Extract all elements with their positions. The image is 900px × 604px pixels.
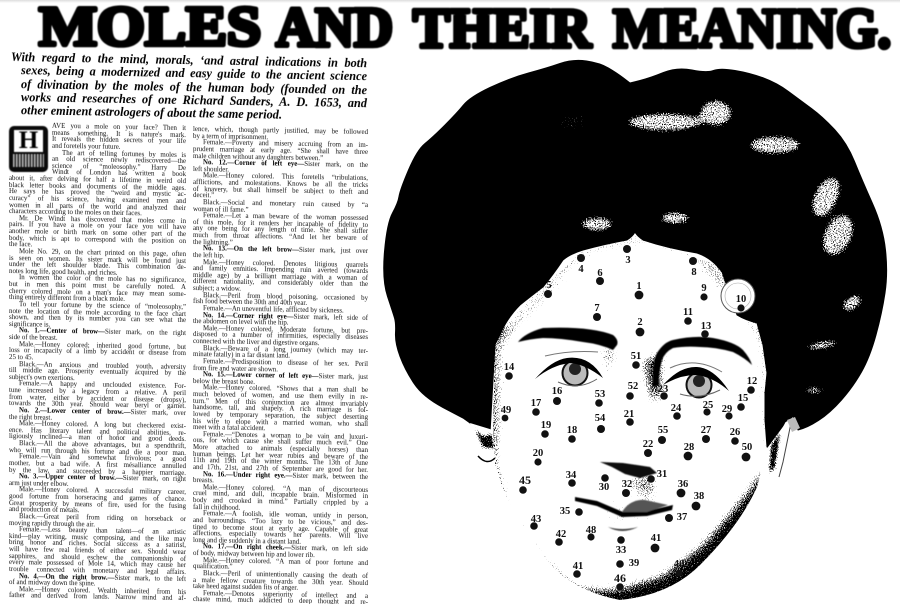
entry: mole no. 3: Female.—Less beauty than talent—of an artistic [19,526,186,536]
mole 33: 33 [616,545,626,556]
entry: mole no. 12: any one being for any length of time. She shall suffer [193,225,368,235]
entry: mole no. 16: fall in childhood. [193,504,240,511]
right eye [663,363,729,398]
icon: drop cap H: H [19,127,38,154]
left eye [535,352,603,386]
mole 1: 1 [636,281,642,292]
entry: mole no. 16: Female.—A foolish, idle woman, untidy in person, [203,510,368,520]
mole 5 [544,280,552,298]
introduction article: AVE you a mole on your face? Then it [52,122,186,132]
mole 31 [647,469,667,483]
introduction article: shown, and then by its number you can see what the [9,314,186,324]
introduction article: characters according to the moles on their faces. [9,208,142,217]
introduction article: Mole No. 29, on the chart printed on this page, often [19,248,186,257]
introduction article: science of “moleosophy.” Harry De [52,162,186,171]
entry: mole no. 3: will have few real friends of either sex. Should wear [9,546,186,556]
mole 45 [519,473,531,494]
entry: mole no. 16: breasts. [193,477,214,484]
entry: mole no. 14: No. 14.—Corner right eye—Sister mark, left side of [203,312,368,322]
entry: mole no. 1 [9,327,186,410]
entry: mole no. 12: of this mole, for it renders her incapable of fidelity to [193,219,368,229]
mole 22 [643,439,653,457]
entry: mole no. 1: No. 1.—Center of brow—Sister mark, on the right [19,327,186,337]
entry: mole no. 15: 11th and 19th of the winter months. The 13th of June [193,457,368,467]
entry: mole no. 14 [193,312,368,373]
entry: mole no. 16: Male.—Honey colored. “A man of discourteous [203,484,368,494]
mole 19 [541,420,551,438]
entry: mole no. 4: Male.—Honey colored. Wealth inherited from his [19,585,186,595]
entry: mole no. 2: mother, but a bad wife. A first mésalliance annulled [9,459,186,469]
mole 3 [623,245,631,266]
entry: mole no. 3: bring honor and riches. Social success as a satirist, [9,539,186,549]
mole 55 [658,425,668,444]
mole 16 [552,386,562,405]
entry: mole no. 3: Black.—Great peril from riding on horseback or [19,513,186,522]
entry: mole no. 17: take heed against sudden fits of anger. [193,583,298,592]
entry: mole no. 16: affections, especially towards her parents. Will live [193,530,368,540]
mole 40 [674,559,684,576]
moles with numbers [501,245,757,591]
mole 20: 20 [533,448,543,459]
mole 42 [555,529,566,546]
mole 9: 9 [701,283,707,294]
mole 35 [560,506,583,517]
entry: mole no. 1: from water, either by accident or disease (dropsy), [9,393,186,403]
text column 1 [9,122,186,602]
subtitle text block: other eminent astrologers of about the same period. [21,103,282,122]
entry: mole no. 15: No. 15.—Lower corner of left eye—Sister mark, just [203,371,368,381]
introduction article: note the location of the mole according to the face chart [9,307,186,317]
entry: end of previous mole: lence, which, though partly justified, may be followed [193,126,368,136]
entry: mole no. 14: disposed to a number of infirmities, especially diseases [193,331,368,341]
entry: mole no. 12: much from throat affections. “And let her beware of [193,232,368,242]
mole 30: 30 [599,482,609,493]
left ear [470,423,496,463]
mole 20 [533,448,543,466]
entry: mole no. 15: Female.—“Denotes a woman to be vain and luxuri- [203,431,368,441]
entry: mole no. 12: of knavery, but shall himself be subject to theft and [193,186,368,196]
entry: mole no. 1: loss or incapacity of a limb by accident or disease from [9,347,186,357]
entry: mole no. 2: ligiously inclined—a man of honor and good deeds. [9,433,186,443]
introduction article: pairs. If you have a mole on your face you will have [9,221,186,231]
introduction article: It reveals the hidden secrets of your life [52,136,186,145]
mole 54: 54 [595,413,606,424]
face chart illustration [383,60,888,600]
mole 8 [689,257,697,278]
mole 38: 38 [694,491,704,502]
entry: mole no. 2: who will run through his fortune and die a poor man. [9,446,186,456]
entry: mole no. 4 [9,572,186,602]
entry: mole no. 17 [193,543,368,604]
introduction article: is seen on women. Its sister mark will be found just [9,254,186,264]
mole 12 [747,376,757,394]
mole 29: 29 [722,404,732,415]
entry: mole no. 17: of body, midway between hip and lower rib. [193,550,315,559]
mole 29 [722,404,733,420]
entry: mole no. 13: No. 13.—On the left brow—Sister mark, just over [203,245,368,255]
entry: mole no. 3: Male.—Honey colored. A successful military career, [19,486,186,496]
mole 10: 10 [736,294,746,305]
entry: mole no. 13: fish food between the 30th and 40th year. [193,298,307,307]
entry: mole no. 17: Female.—Denotes superiority of intellect and a [203,590,368,600]
entry: mole no. 3: Great prosperity by means of fire, used for the fusing [9,499,186,509]
mole 13: 13 [701,321,711,332]
mole 6: 6 [597,268,603,279]
mouth [575,497,673,531]
entry: mole no. 13: subject; a widow. [193,285,241,293]
entry: mole no. 16: cruel mind, and dull, incapable brain. Misformed in [193,490,368,500]
entry: mole no. 3: trouble connected with monetary and legal affairs. [9,565,186,575]
entry: mole no. 12: Female.—Let a man beware of the woman possessed [203,212,368,222]
entry: mole no. 1: till middle age. Prosperity eventually acquired by the [9,367,186,377]
mole 43: 43 [531,514,541,525]
mole 30 [599,474,609,493]
entry: mole no. 16 [193,471,368,546]
entry: end of previous mole: prudent marriage at early age. “She shall have three [193,146,368,156]
mole 6 [596,268,604,285]
entry: mole no. 12: Male.—Honey colored. This foretells “tribulations, [203,173,368,182]
entry: mole no. 17: Male.—Honey colored. “A man of poor fortune and [203,557,368,567]
mole 42: 42 [556,529,566,540]
entry: mole no. 16: body and crooked in mind.” Partially crippled by a [193,497,368,507]
introduction article: but in men this point must be carefully noted. A [9,280,186,291]
mole 4: 4 [578,264,584,275]
entry: mole no. 12: the lightning.” [193,239,233,246]
entry: mole no. 17: qualification.” [193,563,233,571]
introduction article [9,122,186,328]
subtitle text block: sexes, being a modernized and easy guide to the ancient science [21,63,367,84]
face shading [493,236,766,600]
mole 41 chin: 41 [573,561,583,572]
entry: mole no. 1: 25 to 45. [9,353,33,361]
entry: mole no. 15 [193,371,368,474]
subtitle text block: of divination by the moles of the human body (founded on the [21,77,367,97]
mole 33 [616,536,626,556]
introduction article: cherry colored mole on a man's face may mean some- [9,287,186,297]
entry: mole no. 13: middle age) by a brilliant marriage with a woman of [193,272,368,282]
mole 17: 17 [531,398,541,409]
entry: mole no. 15: Male.—Honey colored. “Shows that a man shall be [203,385,368,394]
entry: mole no. 3: every male possessed of Mole 14, which may cause her [9,559,186,569]
introduction article: the face. [9,241,32,248]
mole 41 lower [651,533,661,552]
mole 32 [622,479,632,497]
mole 39: 39 [629,558,639,569]
mole 52: 52 [628,381,638,392]
introduction article: Windt of London has written a book [52,169,186,178]
entry: mole no. 15: his wife to elope with a married woman, who shall [193,418,368,428]
entry: end of previous mole: Female.—Poverty and misery accruing from an im- [203,139,368,149]
mole 2: 2 [637,317,643,328]
entry: mole no. 15: lowed by temporary separation, the subject deserting [193,411,368,421]
mole 11: 11 [683,307,693,318]
entry: mole no. 3: sapphires, and should eschew the companionship of [9,552,186,562]
mole 10 [736,294,746,312]
entry: mole no. 12: No. 12.—Corner of left eye—Sister mark, on the [203,159,368,169]
entry: mole no. 13 [193,245,368,315]
mole 7 [593,303,601,321]
entry: mole no. 15: ous, for which cause she shall suffer much evil.” One [193,437,368,447]
entry: mole no. 12: afflictions, and molestations. Knows be all the tricks [193,179,368,189]
entry: mole no. 4: of and midway down the spine. [9,579,96,587]
entry: mole no. 17: Black.—Peril of unintentionally causing the death of [203,570,368,580]
entry: mole no. 3: arm just under elbow. [9,479,69,487]
entry: mole no. 1: subject's own exertions. [9,373,75,381]
mole 46: 46 [614,571,626,585]
hair [384,60,887,447]
entry: mole no. 2: No. 2.—Lower center of brow.—Sister mark, over [19,407,186,416]
introduction article: To tell your fortune by the science of “moleosophy,” [19,301,186,310]
text column 2 [193,126,368,604]
entry: mole no. 1: towards the 30th year. Should wear beryl or garnet. [9,400,186,410]
mole 13 [701,321,711,338]
entry: mole no. 15: handsome, tall, and shapely. A rich marriage is fol- [193,404,368,414]
introduction article: another mole or birth mark on some other part of the [9,228,186,238]
entry: mole no. 16: long and die suddenly in a distant land. [193,537,301,546]
mole 24 [671,403,682,420]
introduction article: about it, after delving for half a lifetime in weird old [9,174,186,185]
mole 36: 36 [678,479,688,490]
entry: mole no. 2: ence. Has literary talent and political abilities, re- [9,426,186,436]
mole 43 [530,514,541,530]
entry: mole no. 12: woman of ill fame.” [193,206,248,213]
mole 16: 16 [552,386,562,397]
hair curl at temple [721,279,755,313]
entry: mole no. 13: different nationality, and considerably older than the [193,278,368,288]
mole 2 [636,317,644,336]
introduction article: notes long life, good health, and riches. [9,267,118,276]
entry: mole no. 15: and 17th, 21st, and 27th of September are good for her. [193,464,368,474]
hair highlights [554,98,868,395]
mole 49: 49 [501,405,511,416]
mole 27: 27 [701,425,711,436]
entry: mole no. 3: No. 3.—Upper center of brow.—Sister mark, on right [19,473,186,483]
mole 48: 48 [586,525,596,536]
mole 54 [595,413,606,433]
entry: mole no. 13: and family enmities. Impending ruin averted (towards [193,265,368,275]
introduction article: The art of telling fortunes by moles is [62,149,186,158]
introduction article: significance is. [9,320,50,328]
introduction article: women in all parts of the world and analyzed their [9,201,186,211]
entry: mole no. 14: connected with the liver and digestive organs. [193,338,319,347]
introduction article: thing entirely different from a black mole. [9,294,125,303]
entry: mole no. 16: and barroundings. “Too lazy to be vicious,” and des- [193,517,368,527]
entry: mole no. 2: by the law, and succeeded by a happier marriage. [9,466,186,476]
entry: mole no. 12 [193,159,368,246]
entry: mole no. 14: Male.—Honey colored. Moderate fortune, but pre- [203,325,368,335]
mole 53 [595,389,605,407]
introduction article: body, which is apt to correspond with the position on [9,234,186,244]
entry: mole no. 2: Female.—Vain and somewhat frivolous; a good [19,453,186,463]
mole 19: 19 [541,420,551,431]
mole 14: 14 [504,362,515,373]
entry: mole no. 14: Black.—Beware of a long journey (which may ter- [203,345,368,355]
introduction article: an old science newly rediscovered—the [52,155,186,165]
introduction article: means something. It is nature's mark. [52,129,186,138]
mole 18: 18 [567,425,577,436]
entry: end of previous mole [193,126,368,162]
entry: mole no. 13: Female.—An uneventful life, afflicted by sickness. [203,305,344,315]
mole 41 lower: 41 [651,533,661,544]
entry: mole no. 14: minate fatally) in a far distant land. [193,351,290,360]
mole 11 [683,307,693,325]
entry: mole no. 13: Male.—Honey colored. Denotes litigious quarrels [203,259,368,269]
mole 53: 53 [595,389,605,400]
mole 26 [730,427,740,445]
mole 36 [677,479,688,497]
icon: drop cap H [9,126,48,172]
introduction article: In women the color of the mole has no significance, [19,274,186,284]
mole 15 [737,393,748,411]
entry: mole no. 1: Black.—An anxious and troubled youth, adversity [19,360,186,370]
entry: end of previous mole: by a term of imprisonment. [193,133,268,141]
mole 52 [626,381,638,400]
entry: mole no. 15: meet with a fatal accident. [193,424,266,432]
mole 5: 5 [546,280,552,291]
entry: mole no. 12: left shoulder. [193,166,229,173]
mole 45: 45 [519,473,531,487]
entry: mole no. 3: good fortune from horseracing and games of chance. [9,492,186,503]
entry: mole no. 16: No. 16.—Under right eye.—Sister mark, between the [203,471,368,481]
mole 18 [567,425,577,443]
mole 8: 8 [691,267,697,278]
mole 22: 22 [643,439,653,450]
mole 50 [742,442,752,461]
mole 14 [504,362,515,380]
subtitle text block: With regard to the mind, morals, ‘and astral indications in both [11,50,367,70]
entry: mole no. 12: Black.—Social and monetary ruin caused by “a [203,199,368,209]
mole 51 [631,351,641,369]
mole 25: 25 [703,400,713,411]
mole 1 [635,281,643,299]
mole 40: 40 [674,559,684,570]
entry: mole no. 15: below the breast bone. [193,378,255,386]
introduction article: curacy” of his science, having examined men and [9,194,186,204]
mole 50: 50 [742,442,752,453]
entry: mole no. 2: Male.—Honey colored. A long but checkered exist- [19,420,186,430]
mole 27 [701,425,711,443]
mole 15: 15 [738,393,748,404]
mole 23 [658,384,668,400]
entry: mole no. 1: tune increased by a legacy from a relative. A peril [9,386,186,397]
entry: mole no. 14: Female.—Predisposition to disease of her sex. Peril [203,358,368,368]
mole 3: 3 [625,255,631,266]
introduction article: black letter books and documents of the middle ages. [9,181,186,191]
mole 28 [684,442,694,460]
entry: mole no. 16: tined to become stout at early age. Capable of great [193,524,368,534]
mole 7: 7 [594,303,600,314]
introduction article: Mr. De Windt has discovered that moles come in [19,214,186,224]
mole 26: 26 [730,427,740,438]
mole 21 [624,409,634,426]
entry: mole no. 2 [9,407,186,476]
entry: mole no. 15: much beloved of women, and use them evilly in re- [193,391,368,401]
entry: mole no. 3 [9,473,186,575]
title [36,0,892,56]
mole 31: 31 [657,469,667,480]
eyebrows [518,328,752,387]
mole 21: 21 [624,409,634,420]
entry: mole no. 3: moving rapidly through the air. [9,519,95,528]
introduction article: He says he has proved the “weird and mystic ac- [9,188,186,198]
entry: mole no. 4: No. 4.—On the right brow.—Sister mark, to the left [19,572,186,582]
subtitle text block [11,50,368,122]
mole 12: 12 [747,376,757,387]
entry: mole no. 4: father and derived from lands. Narrow mind and af- [9,592,186,602]
mole 17 [531,398,541,416]
mole 34 [566,470,577,487]
entry: mole no. 2: Black.—All the above advantages, but a spendthrift, [19,440,186,450]
mole 41 chin [573,561,583,578]
entry: mole no. 13: Black.—Peril from blood poisoning, occasioned by [203,292,368,302]
entry: mole no. 17: No. 17.—On right cheek.—Sister mark, on left side [203,544,368,553]
entry: mole no. 12: deceit.” [193,192,214,200]
mole 28: 28 [684,442,694,453]
mole 38 [692,491,704,510]
entry: mole no. 1: Female.—A happy and unclouded existence. For- [19,380,186,390]
right ear [765,417,800,482]
entry: mole no. 3: and production of metals. [9,506,79,514]
entry: mole no. 14: from fire and water are shown. [193,364,278,373]
mole 24: 24 [671,403,682,414]
introduction article: and foretells your future. [52,142,120,150]
entry: mole no. 3: kind—play writing, music composing, and the like may [9,532,186,542]
mole 23: 23 [658,384,668,395]
mole 49 [501,405,511,421]
entry: mole no. 14: the abdomen on level with the hip. [193,318,288,327]
entry: mole no. 1: side of the breast. [9,334,58,341]
subtitle text block: works and researches of one Richard Sanders, A. D. 1653, and [21,90,367,110]
mole 51: 51 [631,351,641,362]
entry: mole no. 1: Male.—Honey colored; inherited good fortune, but [19,340,186,350]
mole 9 [700,283,708,301]
mole 4 [577,254,585,275]
entry: mole no. 15: turn.” Men of this conjunction are almost invariably [193,398,368,408]
mole 35: 35 [560,506,570,517]
mole 37 [665,512,687,523]
nose [600,462,657,478]
entry: mole no. 2: the right breast. [9,413,52,421]
introduction article: under the left shoulder blade. This combination de- [9,261,186,271]
entry: mole no. 13: the left hip. [193,252,225,259]
mole 37: 37 [677,512,687,523]
entry: mole no. 15: More attached to animals (especially horses) than [193,444,368,454]
mole 39 [616,558,639,569]
mole 32: 32 [622,479,632,490]
mole 34: 34 [566,470,577,481]
entry: end of previous mole: male children without any daughters between.” [193,152,323,162]
mole 55: 55 [658,425,668,436]
entry: mole no. 15: human beings. Let her wear rubies and beware of the [193,451,368,461]
entry: mole no. 17: a male fellow creature towards the 30th year. Should [193,576,368,587]
